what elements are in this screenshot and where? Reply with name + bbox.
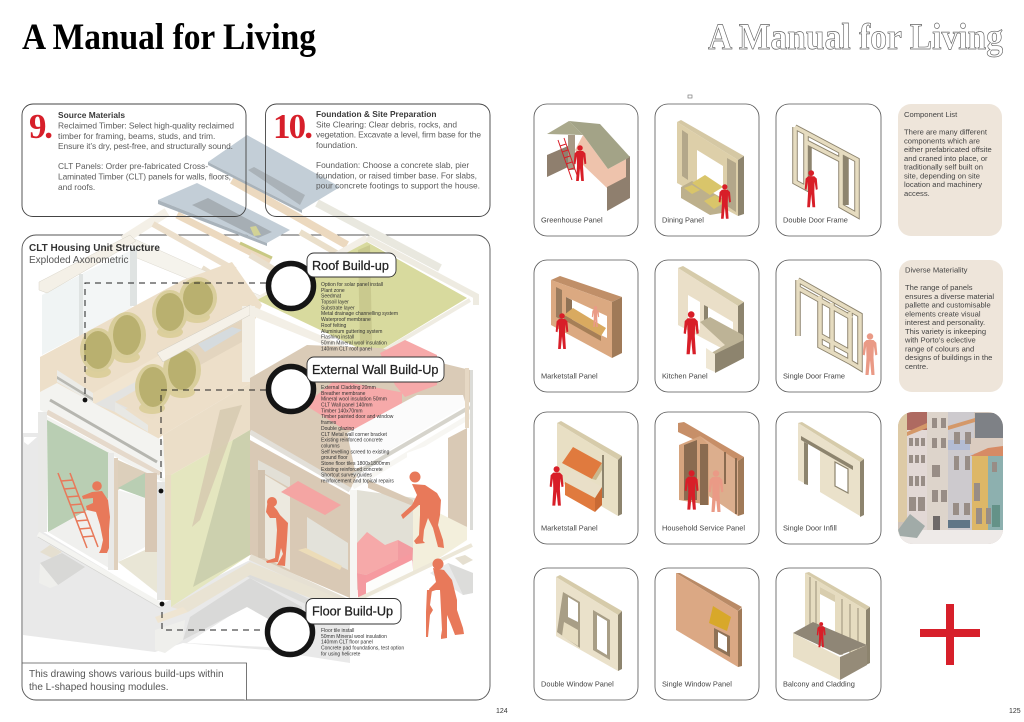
icon: single door infill: [798, 422, 864, 517]
icon: single window panel: [676, 573, 742, 667]
card: balcony and cladding: [776, 568, 881, 700]
card: household service panel: [655, 412, 759, 544]
panel: component list: either prefabricated offsite: [904, 145, 992, 154]
icon: single door frame: [798, 280, 877, 375]
right ground room: [357, 490, 415, 590]
wall layer list: Timber painted door and window: [321, 414, 394, 420]
card: marketstall panel: [534, 260, 638, 392]
title left: A Manual for Living: [22, 17, 316, 58]
wall layer list: Stone floor tiles 1800x1800mm: [321, 461, 390, 467]
wall layer list: Existing reinforced concrete: [321, 438, 383, 444]
label: Greenhouse Panel: [541, 216, 603, 224]
photo: Porto street facades: [898, 412, 1003, 544]
tan wall above green wall: [163, 383, 250, 475]
box 10: foundation and site preparation: foundation.: [316, 140, 357, 150]
label: Double Window Panel: [541, 680, 614, 688]
panel: component list: Component List: [904, 110, 958, 119]
panel: component list: There are many different: [904, 128, 988, 136]
panel: component list: [898, 104, 1002, 236]
roof layer list: Plant zone: [321, 288, 345, 294]
wall layer list: Timber 140x70mm: [321, 408, 362, 414]
card: double door frame: [776, 104, 881, 236]
callout: external wall build-up: [268, 357, 444, 485]
roof layer list: [321, 282, 398, 352]
wall layer list: CLT Metal wall corner bracket: [321, 432, 388, 438]
roof layer list: 140mm CLT roof panel: [321, 346, 372, 352]
icon: marketstall panel brown: [551, 276, 622, 358]
floor layer list: 50mm Mineral wool insulation: [321, 634, 387, 640]
callout: floor build-up: [268, 598, 404, 657]
label: Marketstall Panel: [541, 524, 598, 532]
card: single door infill: [776, 412, 881, 544]
pink upper furniture: [380, 340, 437, 397]
floor layer list: [321, 628, 404, 657]
roof layer list: Metal drainage channelling system: [321, 311, 398, 317]
title right outlined: A Manual for Living: [708, 17, 1003, 58]
floor layer list: for using helicrete: [321, 651, 361, 657]
number 9: 9.: [29, 107, 53, 146]
icon: double door frame: [795, 127, 857, 215]
icon: marketstall panel orange: [550, 421, 622, 516]
icon: dining panel: [677, 120, 744, 219]
panel: component list: site, depending on site: [904, 171, 980, 180]
foundations: [171, 562, 350, 612]
card: greenhouse panel: [534, 104, 638, 236]
wall layer list: reinforcement and topical repairs: [321, 479, 394, 485]
upper glazing: [42, 275, 80, 355]
floor layer list: Concrete pad foundations, test option: [321, 646, 404, 652]
icon: household service panel: [678, 422, 744, 516]
panel: diverse materiality: range of colours and: [905, 344, 974, 353]
body text: Foundation & Site Preparation: [316, 109, 437, 119]
panel: CLT housing unit structure: [22, 235, 490, 700]
wall layer list: Self levelling screed to existing: [321, 449, 390, 455]
upper beams and columns: [242, 306, 255, 382]
box 9: source materials: CLT Panels: Order pre-fabricated Cross-: [58, 161, 208, 171]
panel: diverse materiality: elements create visual: [905, 309, 981, 318]
callout: roof build-up: [268, 253, 398, 352]
person on ladder: [58, 473, 110, 553]
wall layer list: columns: [321, 444, 340, 450]
yellow-green wall: [171, 430, 250, 607]
card: single window panel: [655, 568, 759, 700]
axonometric drawing: [23, 135, 476, 663]
panel: diverse materiality: designs of buildings in the: [905, 353, 992, 362]
corner column: [157, 482, 165, 600]
panel: diverse materiality: centre.: [905, 362, 928, 371]
panel: diverse materiality: This variety is inkeeping: [905, 327, 986, 336]
green roof panel: [250, 238, 367, 305]
label: Single Door Infill: [783, 524, 837, 532]
roof layer list: Flashing install: [321, 335, 354, 341]
drawing heading: Exploded Axonometric: [29, 255, 129, 266]
panel: diverse materiality: The range of panels: [905, 283, 973, 292]
roof layer list: Seedmat: [321, 294, 342, 300]
drawing note: This drawing shows various build-ups within: [29, 669, 224, 680]
label: Dining Panel: [662, 216, 704, 224]
lower tan wall with door: [250, 440, 350, 598]
upper floor planting deck: [40, 262, 262, 447]
wall layer list: Existing reinforced concrete: [321, 467, 383, 473]
left ground room: [47, 420, 109, 532]
panel: component list: and craned into place, or: [904, 154, 988, 163]
wall layer list: [321, 385, 394, 485]
box 10: foundation and site preparation: Site Clearing: Clear debris, rocks, and: [316, 120, 457, 130]
roof layer list: 50mm Mineral wool insulation: [321, 340, 387, 346]
person bending: [401, 472, 444, 548]
drawing note: [22, 663, 246, 700]
wall layer list: Shortcut survey guides: [321, 473, 372, 479]
icon: double window panel: [556, 575, 622, 671]
trees: [80, 277, 217, 414]
wall layer list: Mineral wool insulation 50mm: [321, 397, 387, 403]
wall layer list: Double glazing: [321, 426, 354, 432]
ground shadow: [23, 433, 350, 663]
panel: diverse materiality: [899, 260, 1003, 392]
label: Single Window Panel: [662, 680, 732, 688]
callout: external wall build-up: External Wall Build-Up: [312, 363, 438, 377]
icon: greenhouse panel: [547, 121, 630, 211]
wall layer list: Breather membrane: [321, 391, 366, 397]
number 10: 10.: [273, 107, 313, 146]
floor layer list: 140mm CLT floor panel: [321, 640, 373, 646]
card: single door frame: [776, 260, 881, 392]
box 10: foundation and site preparation: Foundation: Choose a concrete slab, pier: [316, 160, 469, 170]
box 9: source materials: Ensure it’s dry, pest-free, and structurally sound.: [58, 141, 233, 151]
label: Marketstall Panel: [541, 372, 598, 380]
label: Single Door Frame: [783, 372, 845, 380]
person with jackhammer: [426, 558, 464, 639]
dashed leader lines: [85, 283, 266, 630]
tan upper wall: [250, 345, 470, 490]
roof layer list: Option for solar panel install: [321, 282, 383, 288]
icon: kitchen panel: [678, 266, 744, 373]
callout: floor build-up: Floor Build-Up: [312, 604, 393, 618]
person on phone: [266, 497, 288, 566]
floor layer list: Floor tile install: [321, 628, 354, 634]
icon: red plus: [920, 604, 980, 665]
wall layer list: CLT Wall panel 140mm: [321, 402, 373, 408]
body text: Source Materials: [58, 110, 125, 120]
label: Balcony and Cladding: [783, 680, 855, 688]
panel: component list: components which are: [904, 136, 980, 145]
wall layer list: External Cladding 20mm: [321, 385, 376, 391]
panel: diverse materiality: interest and personality.: [905, 318, 985, 327]
panel: diverse materiality: Diverse Materiality: [905, 266, 968, 274]
drawing heading: [29, 243, 160, 266]
box 10: foundation and site preparation: [266, 104, 490, 216]
panel: component list: access.: [904, 189, 930, 198]
drawing note: the L-shaped housing modules.: [29, 682, 169, 693]
roof layer list: Substrate layer: [321, 305, 355, 311]
card: double window panel: [534, 568, 638, 700]
card: marketstall panel orange: [534, 412, 638, 544]
label: Kitchen Panel: [662, 372, 708, 380]
box 10: foundation and site preparation: pour concrete footings to support the house.: [316, 180, 480, 190]
card: kitchen panel: [655, 260, 759, 392]
panel: diverse materiality: with Porto’s eclective: [904, 336, 976, 344]
pink canopy panel: [281, 481, 341, 515]
callout: roof build-up: Roof Build-up: [312, 259, 389, 273]
box 10: foundation and site preparation: foundation, or raised timber base. For slabs,: [316, 170, 477, 180]
white roof beam: [130, 237, 263, 305]
roof layer list: Topsoil layer: [321, 300, 349, 306]
panel: component list: location and machinery: [904, 180, 982, 189]
panel: diverse materiality: pallette and customisable: [905, 300, 991, 310]
drawing heading: CLT Housing Unit Structure: [29, 243, 160, 254]
leader dots: [83, 398, 164, 606]
deck front beams: [40, 383, 165, 472]
card: dining panel: [655, 104, 759, 236]
panel: diverse materiality: ensures a diverse material: [905, 292, 994, 301]
label: Double Door Frame: [783, 216, 848, 224]
box 10: foundation and site preparation: vegetation. Excavate a level, firm base for the: [316, 130, 481, 140]
wall layer list: frames: [321, 420, 337, 426]
box 9: source materials: timber for framing, beams, studs, and trim.: [58, 131, 215, 141]
roof layer list: Roof felting: [321, 323, 347, 329]
box 9: source materials: Reclaimed Timber: Select high-quality reclaimed: [58, 120, 234, 130]
panel: component list: traditionally self built on: [904, 162, 983, 172]
wall layer list: ground floor: [321, 455, 348, 461]
box 9: source materials: and roofs.: [58, 182, 95, 192]
label: Household Service Panel: [662, 524, 745, 532]
page number 124: 124: [496, 708, 508, 715]
roof layer list: Waterproof membrane: [321, 317, 371, 323]
icon: balcony and cladding: [793, 572, 870, 680]
roof layer list: Aluminium guttering system: [321, 329, 382, 335]
exploded roof layer: [123, 135, 440, 296]
box 9: source materials: Laminated Timber (CLT) panels for walls, floors,: [58, 172, 231, 182]
page number 125: 125: [1009, 708, 1021, 715]
small mark: [688, 95, 692, 98]
box 9: source materials: [22, 104, 246, 216]
